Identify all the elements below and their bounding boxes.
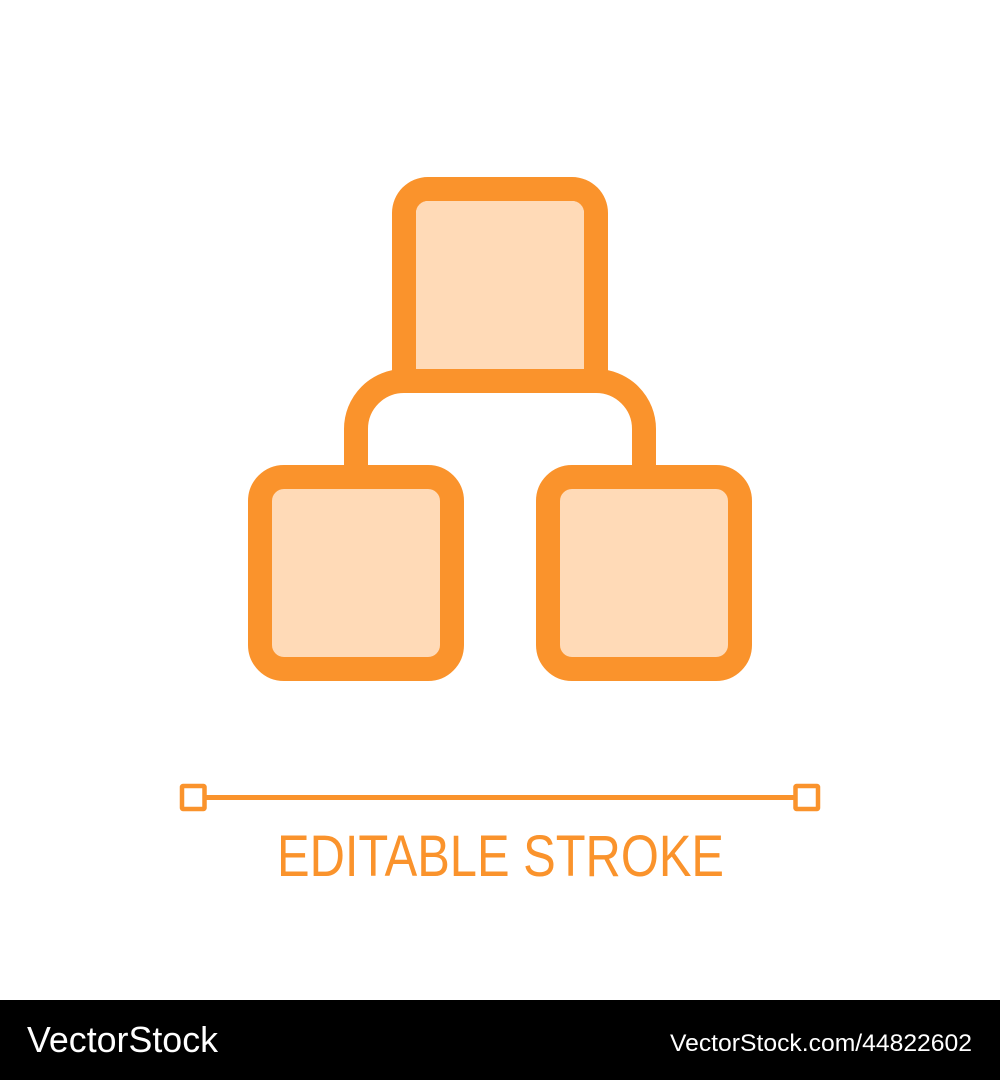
top box bbox=[392, 177, 608, 381]
line bbox=[205, 795, 795, 800]
editable stroke line with handles bbox=[182, 786, 818, 809]
bottom right box bbox=[548, 477, 740, 669]
footer bar bbox=[0, 1000, 1000, 1080]
right handle bbox=[796, 786, 818, 809]
connector bbox=[356, 381, 644, 477]
brand name: VectorStock bbox=[27, 1019, 219, 1060]
left handle bbox=[182, 786, 204, 809]
icon: hierarchy diagram bbox=[260, 177, 740, 669]
image id: VectorStock.com/44822602 bbox=[670, 1030, 972, 1057]
caption: EDITABLE STROKE bbox=[277, 824, 724, 889]
bottom left box bbox=[260, 477, 452, 669]
footer background bbox=[0, 1000, 1000, 1080]
top box fill bbox=[416, 201, 584, 369]
